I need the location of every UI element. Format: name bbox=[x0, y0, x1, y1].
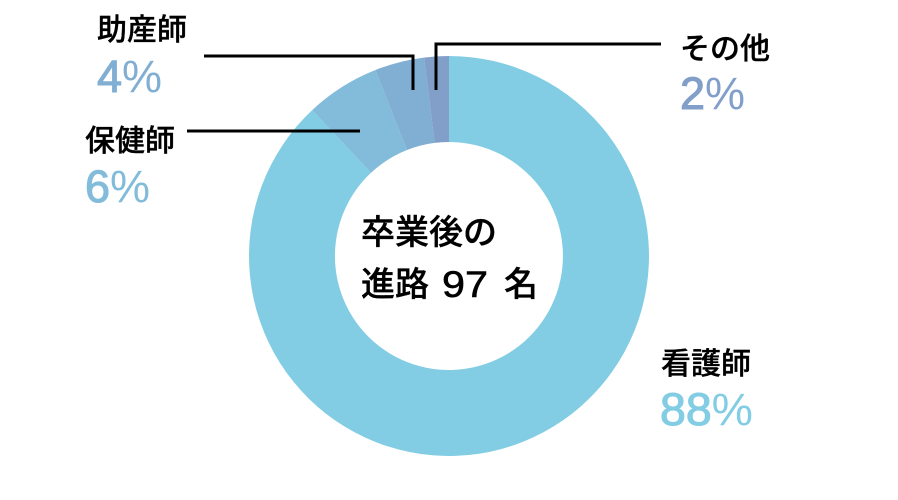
segment: 保健師 6% bbox=[312, 70, 407, 173]
donut chart bbox=[249, 56, 649, 456]
label: 看護師 88%: 看護師 bbox=[661, 348, 751, 381]
segment: その他 2% bbox=[424, 56, 449, 143]
label: 助産師 4% bbox=[97, 14, 187, 102]
center label: 97 bbox=[442, 264, 488, 305]
leader line: 助産師 bbox=[204, 56, 413, 90]
center label: 名 bbox=[504, 266, 538, 304]
center label: 卒業後の bbox=[361, 214, 497, 252]
label: 看護師 88% bbox=[660, 348, 753, 435]
label: 保健師 6%: 6% bbox=[85, 161, 150, 212]
leader line: その他 bbox=[436, 44, 661, 90]
label: 保健師 6% bbox=[85, 125, 175, 212]
segment: 看護師 88% bbox=[249, 56, 649, 456]
segment: 助産師 4% bbox=[375, 58, 435, 150]
label: その他 2%: 2% bbox=[680, 68, 745, 119]
label: 看護師 88%: 88% bbox=[660, 384, 753, 435]
label: 保健師 6%: 保健師 bbox=[85, 125, 175, 158]
center label: 進路 bbox=[361, 266, 429, 304]
center label bbox=[361, 214, 538, 305]
leader line: 保健師 bbox=[187, 130, 360, 132]
label: その他 2% bbox=[680, 33, 770, 119]
label: 助産師 4%: 4% bbox=[97, 51, 162, 102]
label: 助産師 4%: 助産師 bbox=[97, 14, 187, 47]
label: その他 2%: その他 bbox=[680, 33, 770, 66]
